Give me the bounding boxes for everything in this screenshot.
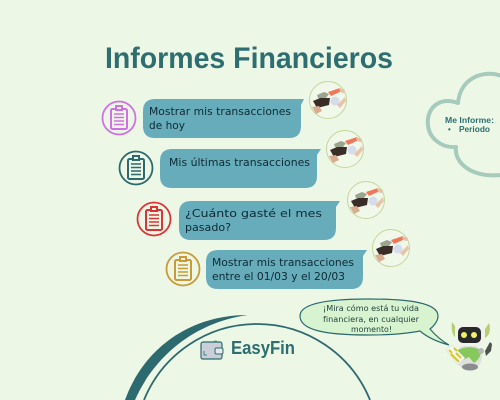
text: cloud note: Me Informe: — [445, 116, 494, 125]
text: request 3: ¿Cuánto gasté el mes — [185, 207, 322, 220]
icon: wallet — [201, 340, 223, 359]
photo: money exchange 1 — [310, 82, 346, 118]
speech bubble 2 — [160, 149, 321, 188]
icon: gold clipboard — [166, 252, 200, 286]
speech bubble 4 — [206, 250, 367, 289]
callout: speech bubble: momento! — [351, 325, 392, 334]
photo: money exchange 3 — [348, 182, 384, 218]
text: request 2: Mis últimas transacciones — [169, 156, 310, 169]
panel: request 3 — [138, 182, 384, 240]
callout: speech bubble: ¡Mira cómo está tu vida — [323, 304, 419, 313]
panel: request 1 — [102, 82, 346, 138]
text: cloud note: • — [448, 125, 451, 134]
icon: red clipboard — [138, 202, 170, 236]
decorative arc: thick crescent — [125, 315, 248, 400]
icon: teal clipboard — [120, 152, 152, 184]
text: cloud note: Periodo — [459, 125, 490, 134]
cloud outline — [428, 74, 500, 175]
wordmark: EasyFin — [231, 338, 295, 358]
callout: speech bubble — [300, 299, 449, 345]
icon: robot — [446, 322, 492, 370]
callout: speech bubble: financiera, en cualquier — [323, 315, 420, 324]
text: request 4: Mostrar mis transacciones — [212, 256, 354, 269]
decorative arc: thin — [144, 324, 370, 400]
logo: EasyFin — [201, 338, 295, 359]
panel: request 4 — [166, 230, 410, 289]
title: Informes Financieros — [105, 42, 393, 75]
text: request 1: Mostrar mis transacciones — [149, 105, 291, 118]
speech bubble 3 — [179, 201, 340, 240]
speech bubble 1 — [143, 99, 304, 138]
panel: cloud note — [428, 74, 500, 175]
photo: money exchange 2 — [326, 130, 364, 168]
icon: purple clipboard — [102, 102, 136, 134]
photo: money exchange 4 — [372, 230, 410, 266]
text: request 1: de hoy — [149, 119, 186, 132]
text: request 4: entre el 01/03 y el 20/03 — [212, 270, 345, 283]
text: request 3: pasado? — [185, 221, 231, 234]
panel: request 2 — [120, 130, 364, 188]
